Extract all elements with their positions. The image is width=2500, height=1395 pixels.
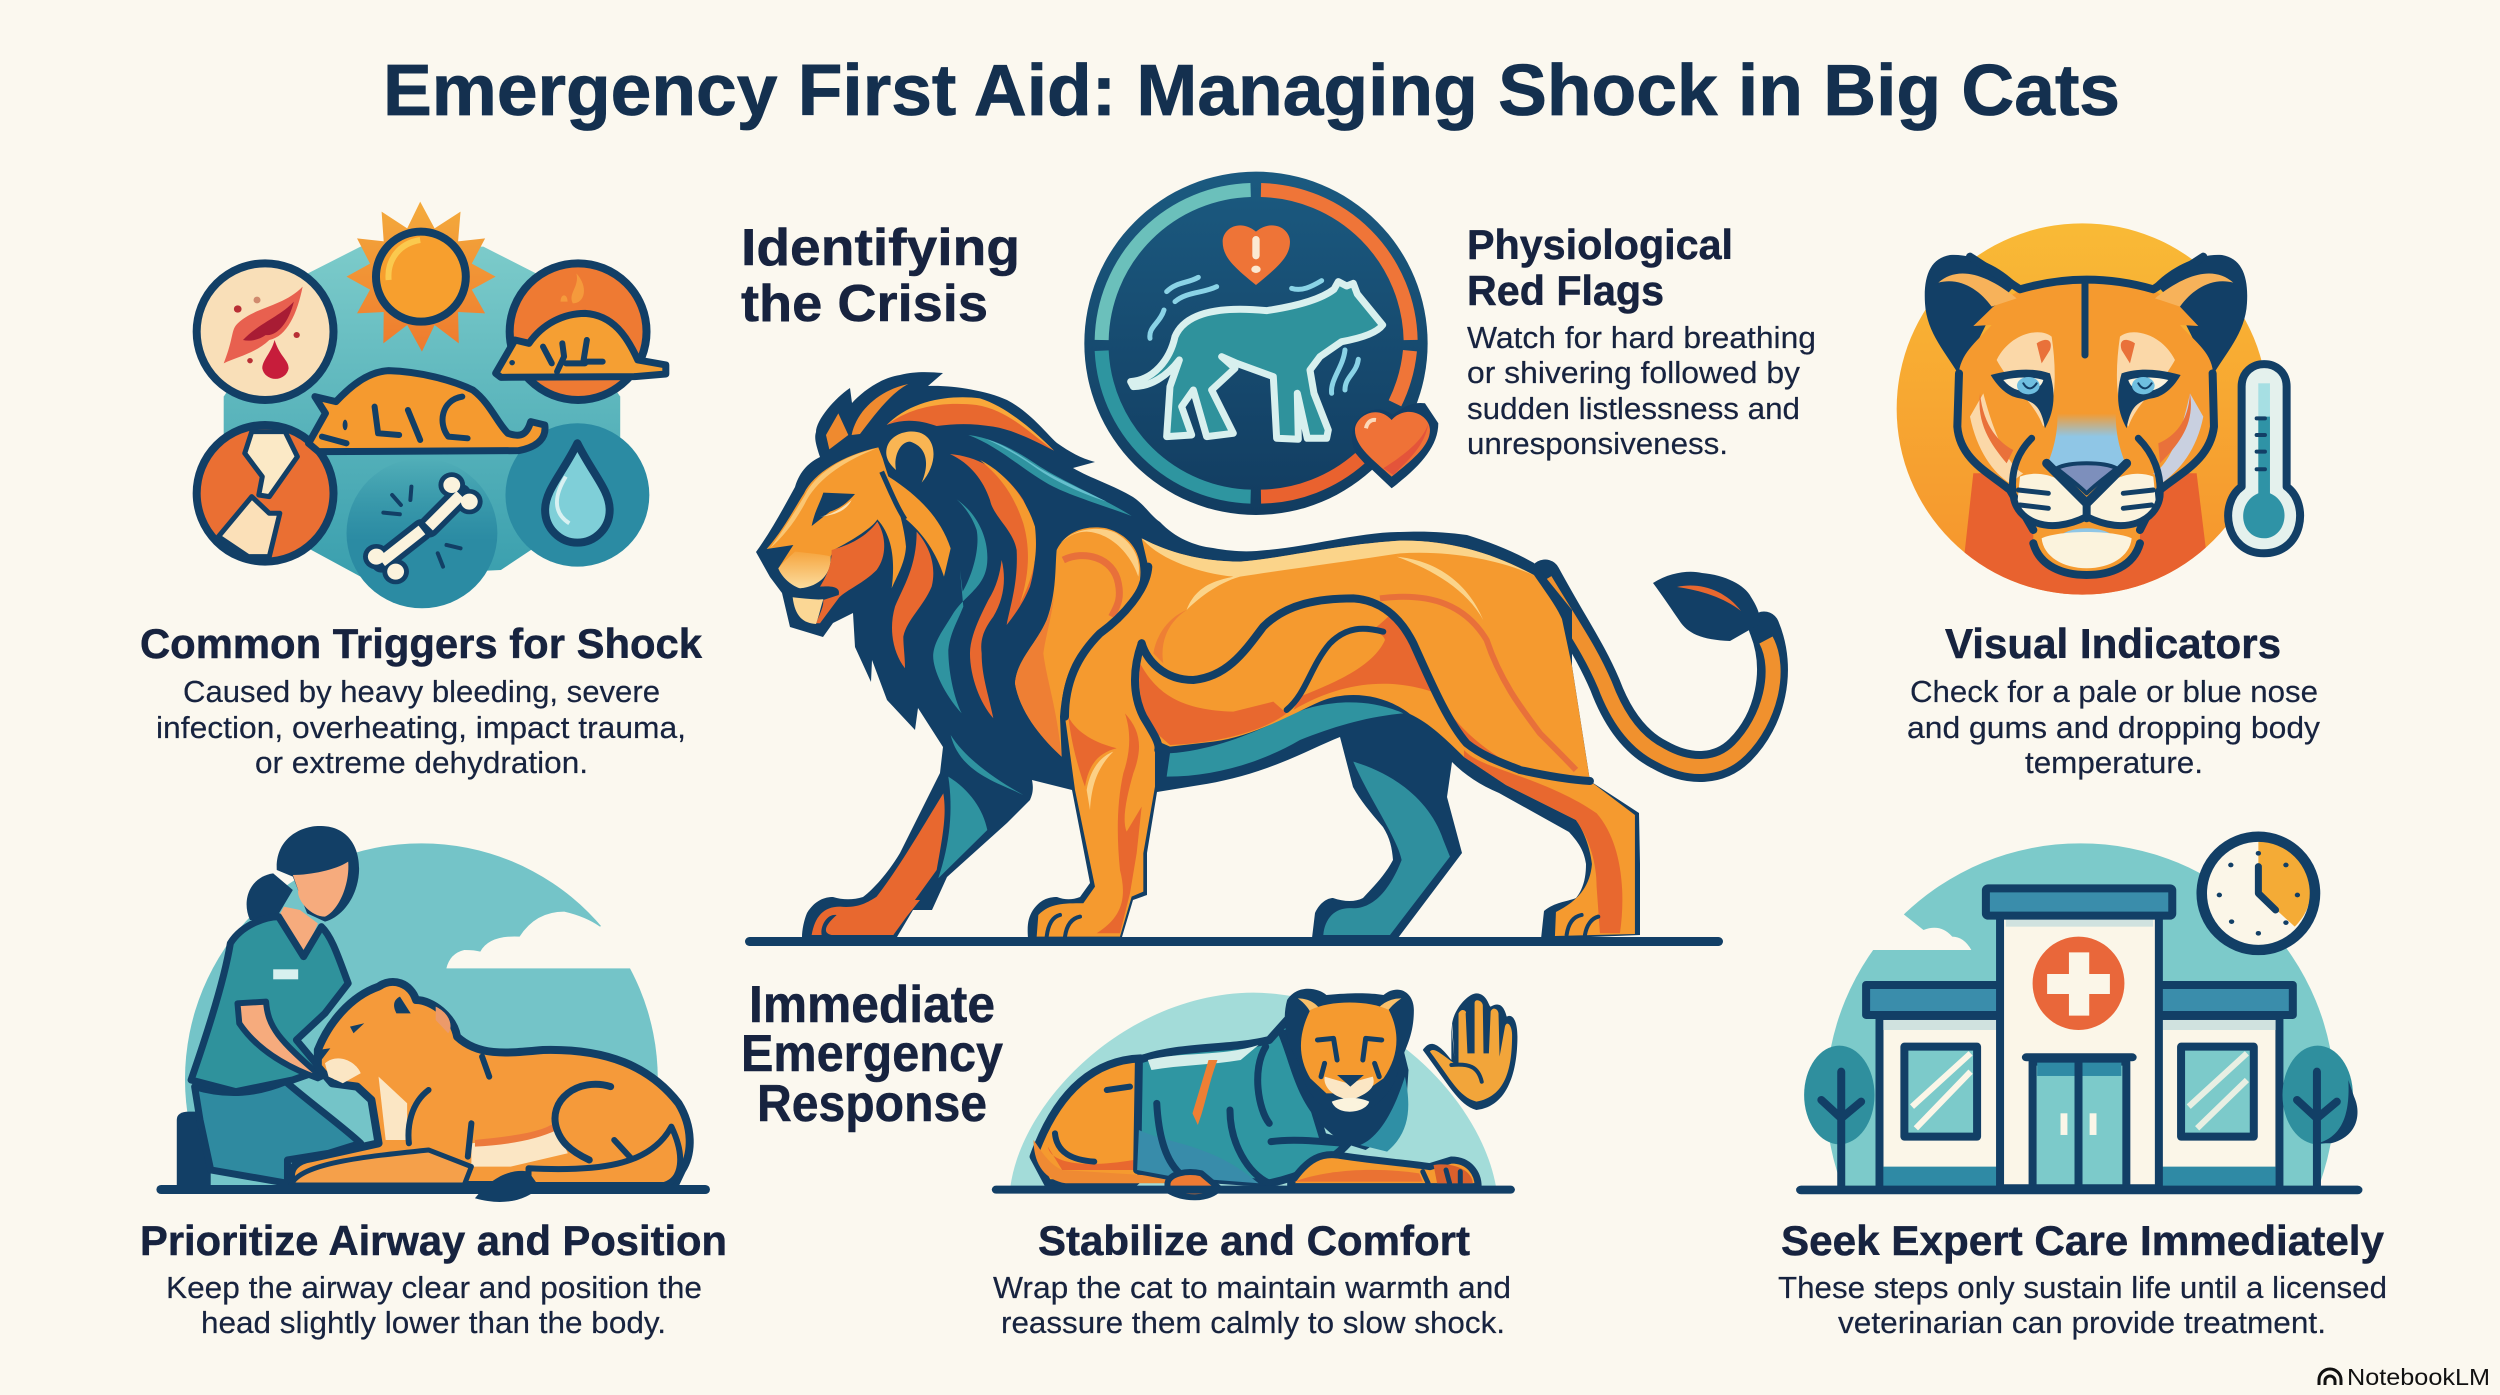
lion head and mane (767, 384, 1132, 718)
panel: prioritize airway (140, 826, 727, 1340)
text: common triggers body: Caused by heavy bleeding, severe (183, 674, 660, 709)
text: stabilize and comfort body: reassure them calmly to slow shock. (1001, 1305, 1505, 1340)
text: visual indicators body: and gums and dropping body (1907, 710, 2321, 745)
icon: physiological red flags badge (1084, 172, 1438, 515)
illustration: central lion (745, 372, 1773, 946)
text: common triggers body (156, 674, 686, 780)
section heading: immediate emergency response: Emergency (741, 1025, 1003, 1083)
heading: stabilize and comfort: Stabilize and Comfort (1038, 1217, 1470, 1264)
text: seek expert care body: These steps only sustain life until a licensed (1778, 1270, 2387, 1305)
lion far foreleg (812, 735, 1023, 935)
text: prioritize airway body: head slightly lower than the body. (201, 1305, 666, 1340)
text: prioritize airway body: Keep the airway clear and position the (166, 1270, 702, 1305)
text: red flags body: Watch for hard breathing (1467, 320, 1816, 355)
illustration: wrapped lioness with hand (992, 989, 1517, 1197)
illustration: veterinary hospital with clock (1796, 832, 2362, 1194)
ground line under lion (745, 937, 1723, 946)
text: red flags body: sudden listlessness and (1467, 391, 1800, 426)
text: seek expert care body (1778, 1270, 2387, 1340)
lion silhouette (756, 372, 1640, 939)
panel: visual indicators (1897, 223, 2321, 780)
lion body and near legs (1015, 527, 1635, 937)
panel: seek expert care (1778, 836, 2387, 1351)
section heading: immediate emergency response: Response (757, 1075, 987, 1133)
text: red flags body (1467, 320, 1816, 461)
section heading: immediate emergency response: Immediate (749, 976, 995, 1034)
watermark: NotebookLM: NotebookLM (2347, 1364, 2490, 1390)
section heading: immediate emergency response (741, 976, 1003, 1133)
heading: visual indicators: Visual Indicators (1945, 620, 2281, 667)
icon: cat face with thermometer (1897, 223, 2300, 610)
illustration: vet with lioness (156, 826, 710, 1202)
panel: stabilize and comfort (992, 989, 1517, 1340)
panel: physiological red flags text (1467, 221, 1816, 461)
heading: common triggers: Common Triggers for Shock (140, 620, 703, 667)
section heading: identifying the crisis: the Crisis (741, 275, 988, 333)
text: visual indicators body: temperature. (2025, 745, 2203, 780)
icon: triggers cluster (197, 202, 666, 608)
text: common triggers body: infection, overheating, impact trauma, (156, 710, 686, 745)
heading: seek expert care: Seek Expert Care Immediately (1781, 1217, 2385, 1264)
lion tail (1545, 572, 1773, 766)
text: stabilize and comfort body: Wrap the cat to maintain warmth and (993, 1270, 1511, 1305)
text: stabilize and comfort body (993, 1270, 1511, 1340)
text: red flags body: or shivering followed by (1467, 355, 1801, 390)
heading: prioritize airway: Prioritize Airway and Position (140, 1217, 727, 1264)
text: seek expert care body: veterinarian can provide treatment. (1838, 1305, 2326, 1340)
text: visual indicators body (1907, 674, 2321, 780)
text: visual indicators body: Check for a pale or blue nose (1910, 674, 2318, 709)
section heading: identifying the crisis (741, 219, 1020, 333)
text: red flags body: unresponsiveness. (1467, 426, 1728, 461)
heading: physiological red flags: Physiological (1467, 221, 1733, 268)
text: common triggers body: or extreme dehydration. (255, 745, 588, 780)
section heading: identifying the crisis: Identifying (741, 219, 1020, 277)
text: prioritize airway body (166, 1270, 702, 1340)
heading: physiological red flags: Red Flags (1467, 267, 1664, 314)
title: Emergency First Aid: Managing Shock in Big Cats (383, 51, 2120, 131)
panel: common triggers (140, 202, 703, 780)
heading: physiological red flags (1467, 221, 1733, 314)
